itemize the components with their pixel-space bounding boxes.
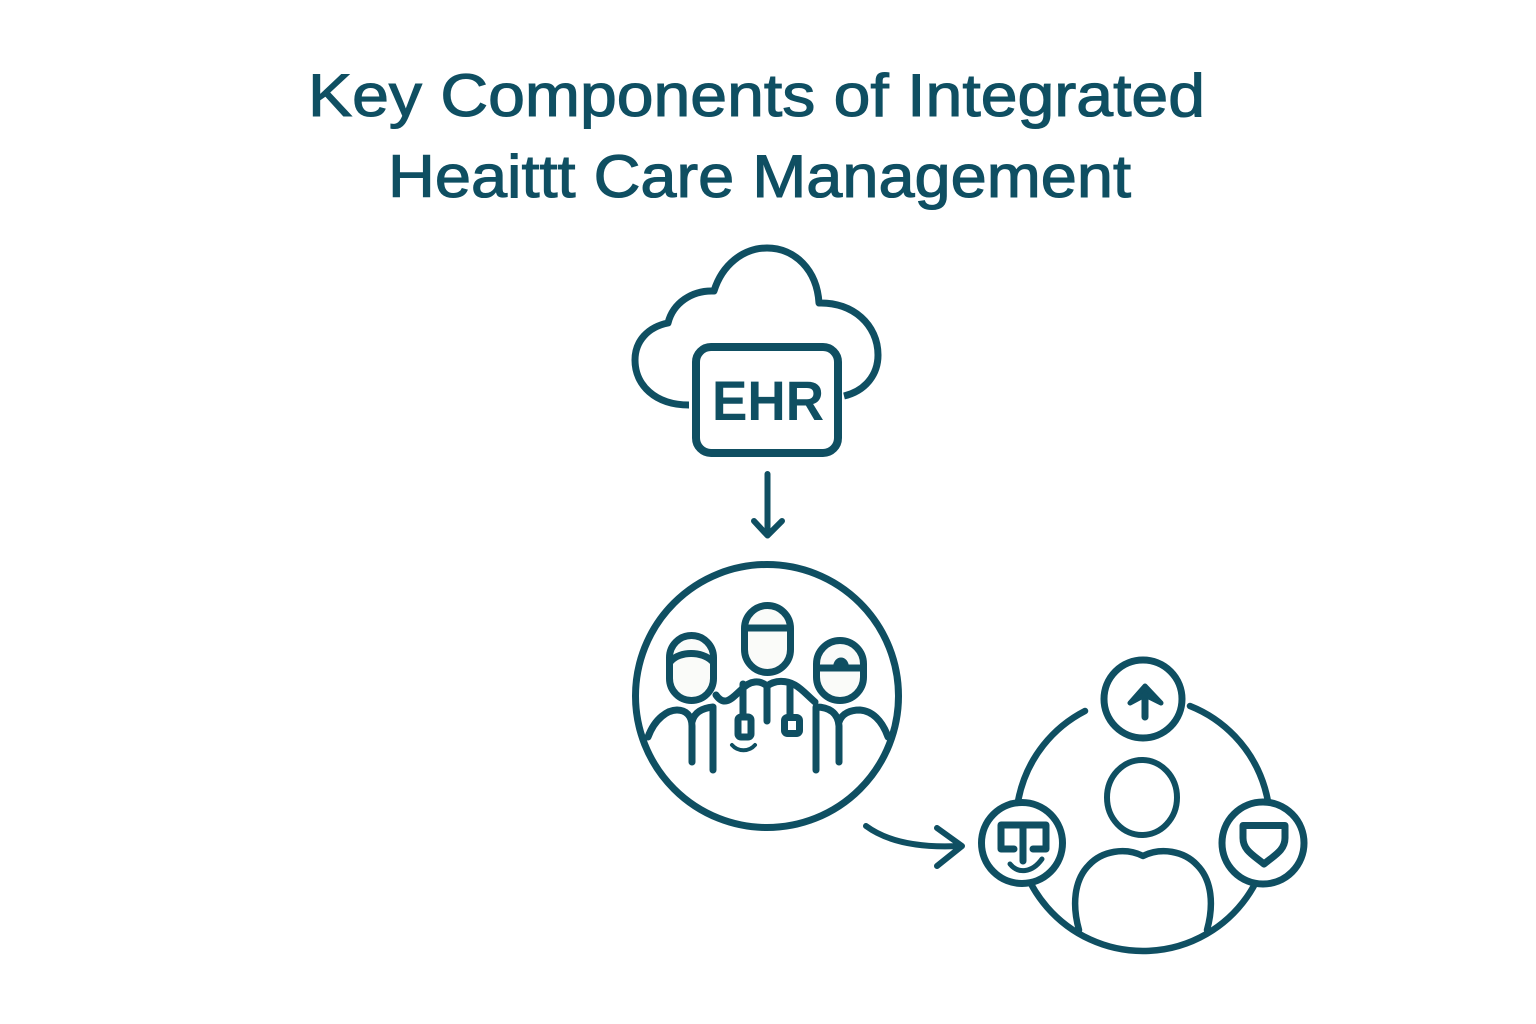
node: upload arrow bbox=[1104, 660, 1182, 738]
left team member head bbox=[670, 636, 714, 700]
title: Key Components of Integrated bbox=[308, 62, 1205, 129]
centre member shoulders and stethoscope bbox=[716, 681, 815, 750]
title bbox=[308, 62, 1205, 210]
arrow: care team to patient bbox=[866, 826, 962, 866]
right team member head bbox=[816, 640, 864, 700]
left member body bbox=[648, 707, 713, 770]
patient body bbox=[1075, 851, 1211, 930]
outer ring bbox=[636, 564, 898, 828]
arrow: EHR to care team bbox=[754, 474, 782, 536]
EHR box bbox=[696, 347, 838, 453]
icon: EHR cloud bbox=[635, 248, 878, 453]
connecting ring bbox=[1016, 706, 1270, 951]
node: shield bbox=[1222, 802, 1304, 884]
icon: care team circle bbox=[636, 564, 898, 828]
EHR label: EHR bbox=[712, 369, 824, 432]
node: telehealth screen bbox=[982, 802, 1062, 884]
icon: patient-centred care ring bbox=[982, 660, 1304, 951]
patient head bbox=[1107, 760, 1177, 835]
centre team member head bbox=[744, 606, 790, 672]
cloud outline bbox=[635, 248, 878, 405]
title: Heaittt Care Management bbox=[388, 143, 1131, 210]
right member body bbox=[816, 707, 888, 770]
